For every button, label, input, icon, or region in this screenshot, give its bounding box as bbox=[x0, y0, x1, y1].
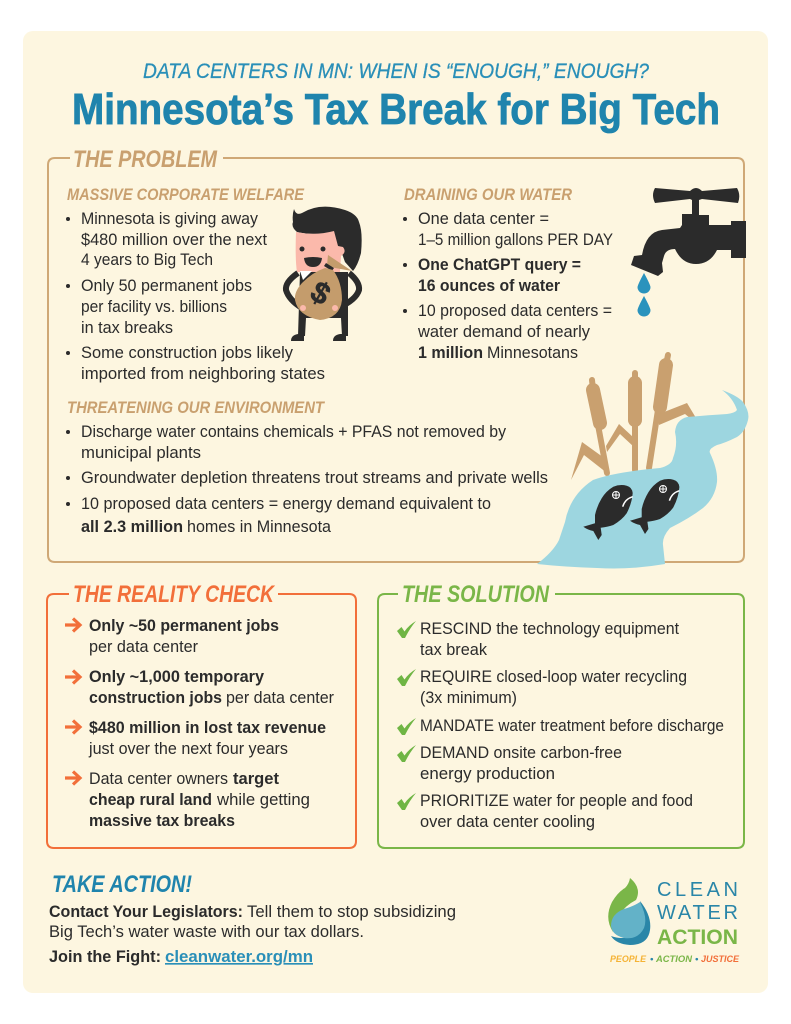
section: massive corporate welfare: Only 50 permanent jobs bbox=[81, 277, 252, 295]
section: threatening our environment: Discharge water contains chemicals + PFAS not removed by bbox=[81, 423, 507, 441]
section: threatening our environment bbox=[66, 398, 548, 536]
section: massive corporate welfare: Some construction jobs likely bbox=[81, 344, 294, 362]
heading: the problem: THE PROBLEM bbox=[73, 146, 218, 173]
reality check list: per data center bbox=[226, 689, 334, 707]
subtitle: DATA CENTERS IN MN: WHEN IS “ENOUGH,” ENOUGH? bbox=[143, 59, 649, 83]
logo wordmark bbox=[657, 879, 738, 949]
solution list: tax break bbox=[420, 641, 488, 659]
reality check list: just over the next four years bbox=[88, 740, 288, 758]
section: massive corporate welfare: $480 million over the next bbox=[81, 231, 267, 249]
call to action text: Tell them to stop subsidizing bbox=[247, 903, 456, 921]
title: Minnesota’s Tax Break for Big Tech bbox=[72, 85, 720, 134]
reality check list bbox=[88, 617, 334, 830]
reality check list: Data center owners bbox=[89, 770, 228, 788]
fish right bbox=[630, 479, 679, 534]
solution list: DEMAND onsite carbon-free bbox=[420, 744, 622, 762]
solution list: RESCIND the technology equipment bbox=[420, 620, 679, 638]
section: threatening our environment: homes in Minnesota bbox=[187, 518, 332, 536]
heading: the reality check: THE REALITY CHECK bbox=[73, 581, 275, 608]
take action block bbox=[49, 871, 456, 966]
logo tagline: JUSTICE bbox=[701, 954, 740, 965]
call to action text: Contact Your Legislators: bbox=[49, 903, 243, 921]
logo tagline bbox=[610, 954, 740, 965]
section: massive corporate welfare: 4 years to Big Tech bbox=[81, 251, 213, 269]
logo tagline: PEOPLE bbox=[610, 954, 647, 965]
reality check list: Only ~50 permanent jobs bbox=[89, 617, 279, 635]
logo tagline: ACTION bbox=[655, 954, 693, 965]
section: draining our water: 1–5 million gallons PER DAY bbox=[418, 231, 613, 249]
solution list: REQUIRE closed-loop water recycling bbox=[420, 668, 687, 686]
panel: the problem bbox=[48, 146, 748, 568]
reality check list: per data center bbox=[89, 638, 198, 656]
reality check list: construction jobs bbox=[89, 689, 222, 707]
call to action text bbox=[49, 903, 456, 966]
logo drop and leaf bbox=[608, 878, 650, 945]
section: draining our water: 10 proposed data centers = bbox=[418, 302, 612, 320]
section: massive corporate welfare: Minnesota is giving away bbox=[81, 210, 259, 228]
section: threatening our environment: all 2.3 million bbox=[81, 518, 183, 536]
arrow icons bbox=[65, 618, 80, 784]
solution list: MANDATE water treatment before discharge bbox=[420, 717, 724, 735]
reality check list: cheap rural land bbox=[89, 791, 212, 809]
section: draining our water: 1 million bbox=[418, 344, 483, 362]
call to action text: cleanwater.org/mn bbox=[165, 948, 313, 966]
icon: faucet with drips bbox=[631, 188, 746, 317]
solution list bbox=[420, 620, 724, 831]
section: draining our water bbox=[403, 185, 613, 362]
logo: clean water action bbox=[608, 878, 740, 965]
section: draining our water: One data center = bbox=[418, 210, 549, 228]
icon: cattails and river with dead fish bbox=[537, 355, 748, 568]
section: draining our water: Minnesotans bbox=[487, 344, 578, 362]
section: massive corporate welfare: in tax breaks bbox=[81, 319, 173, 337]
icon: man holding money bag: $ bbox=[305, 275, 336, 312]
check mark icons bbox=[397, 621, 416, 810]
logo tagline: • bbox=[650, 954, 654, 965]
logo wordmark: CLEAN bbox=[657, 879, 738, 901]
heading: the solution: THE SOLUTION bbox=[402, 581, 550, 608]
reality check list: Only ~1,000 temporary bbox=[89, 668, 265, 686]
call to action text: Join the Fight: bbox=[49, 948, 161, 966]
section: draining our water: One ChatGPT query = bbox=[418, 256, 581, 274]
logo wordmark: ACTION bbox=[657, 926, 738, 949]
call to action text: Big Tech’s water waste with our tax dollars. bbox=[49, 923, 364, 941]
fish left bbox=[583, 485, 633, 540]
section: massive corporate welfare bbox=[66, 185, 325, 383]
icon: man holding money bag bbox=[286, 207, 362, 341]
section: threatening our environment: 10 proposed data centers = energy demand equivalent to bbox=[81, 495, 491, 513]
section: threatening our environment: THREATENING OUR ENVIRONMENT bbox=[67, 398, 325, 417]
logo wordmark: WATER bbox=[657, 902, 738, 924]
section: draining our water: 16 ounces of water bbox=[418, 277, 561, 295]
section: threatening our environment: Groundwater depletion threatens trout streams and private wells bbox=[81, 469, 548, 487]
panel: the solution bbox=[378, 581, 744, 848]
section: threatening our environment: municipal plants bbox=[81, 444, 201, 462]
heading: take action: TAKE ACTION! bbox=[52, 871, 192, 898]
header bbox=[72, 59, 720, 134]
section: draining our water: DRAINING OUR WATER bbox=[404, 185, 573, 204]
section: massive corporate welfare: per facility vs. billions bbox=[81, 298, 227, 316]
solution list: energy production bbox=[420, 765, 555, 783]
reality check list: target bbox=[233, 770, 280, 788]
solution list: (3x minimum) bbox=[420, 689, 517, 707]
reality check list: massive tax breaks bbox=[89, 812, 235, 830]
solution list: over data center cooling bbox=[420, 813, 595, 831]
section: massive corporate welfare: imported from neighboring states bbox=[81, 365, 325, 383]
panel: the reality check bbox=[47, 581, 356, 848]
section: draining our water: water demand of nearly bbox=[417, 323, 591, 341]
solution list: PRIORITIZE water for people and food bbox=[420, 792, 693, 810]
logo tagline: • bbox=[695, 954, 699, 965]
section: massive corporate welfare: MASSIVE CORPORATE WELFARE bbox=[67, 185, 305, 204]
reality check list: $480 million in lost tax revenue bbox=[89, 719, 326, 737]
reality check list: while getting bbox=[216, 791, 310, 809]
